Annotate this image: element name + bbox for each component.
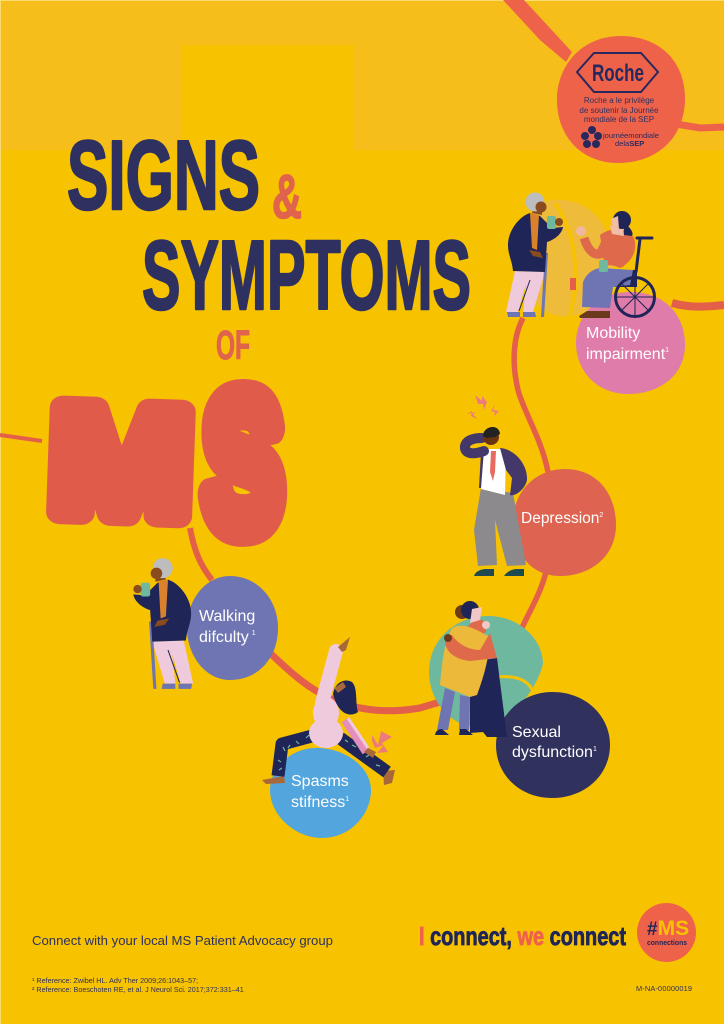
pale circle behind mobility figures <box>525 200 613 316</box>
Roche statement: de soutenir la Journée <box>579 106 659 115</box>
label: walking difficulty: 1 <box>252 630 256 637</box>
figure: standing elder with cane <box>506 192 563 317</box>
title: MS lettering: M <box>47 375 195 550</box>
arc on pale circle <box>555 203 576 316</box>
figure: man with hand on head <box>465 395 527 576</box>
bubble: walking difficulty <box>187 576 278 680</box>
title: ampersand: & <box>272 163 302 232</box>
title: Symptoms: SYMPTOMS <box>142 220 471 330</box>
Roche statement: Roche a le privilège <box>584 96 655 105</box>
world MS day logo: journéemondiale <box>602 131 659 140</box>
figure: hugging couple <box>435 601 507 737</box>
MS connections badge: connections <box>647 938 687 947</box>
footer: references: ¹ Reference: Zwibel HL. Adv Ther 2009;26:1043–57; <box>32 976 198 985</box>
label: mobility impairment: Mobility <box>586 325 640 342</box>
slogan: I connect, we connect <box>419 921 626 951</box>
Roche sponsor badge <box>557 36 685 163</box>
footer: references: ² Reference: Boeschoten RE, et al. J Neurol Sci. 2017;372:331–41 <box>32 985 244 994</box>
Roche statement: mondiale de la SEP <box>584 115 654 124</box>
bubble: sexual dysfunction <box>496 692 610 798</box>
label: walking difficulty: difculty <box>199 629 249 646</box>
connecting ribbon <box>0 0 724 711</box>
world MS day logo: delaSEP <box>615 139 644 148</box>
Roche hexagon logo <box>577 53 658 92</box>
label: mobility impairment: impairment <box>586 346 666 363</box>
title: MS lettering <box>47 355 282 570</box>
teal circle behind couple <box>429 616 543 727</box>
label: walking difficulty: Walking <box>199 608 255 625</box>
bubble: mobility impairment <box>576 292 685 394</box>
MS connections badge <box>637 903 696 962</box>
label: spasms stiffness: Spasms <box>291 773 349 790</box>
figure: elder with mug and cane <box>133 558 193 689</box>
label: depression: Depression <box>521 510 599 527</box>
world MS day logo <box>581 126 659 148</box>
footer: document code: M-NA-00000019 <box>636 984 692 993</box>
ribbon fragment on arc <box>570 278 576 290</box>
title: MS lettering: S <box>204 355 282 570</box>
label: mobility impairment: 1 <box>665 347 669 354</box>
label: spasms stiffness: 1 <box>345 796 349 803</box>
label: spasms stiffness: stifness <box>291 794 345 811</box>
bubble: depression <box>513 469 616 576</box>
label: sexual dysfunction: dysfunction <box>512 744 593 761</box>
MS connections badge: #MS <box>647 917 689 940</box>
figure: stretching woman <box>262 637 395 785</box>
arc on teal circle <box>497 677 534 694</box>
footer: advocacy line: Connect with your local MS Patient Advocacy group <box>32 933 333 948</box>
figure: woman in wheelchair <box>576 211 655 318</box>
label: sexual dysfunction: Sexual <box>512 724 561 741</box>
label: depression: 2 <box>599 512 603 519</box>
Roche wordmark: Roche <box>592 60 644 87</box>
bubble: spasms stiffness <box>270 748 371 838</box>
title: of: OF <box>216 322 250 368</box>
title: Signs: SIGNS <box>67 120 260 230</box>
label: sexual dysfunction: 1 <box>593 746 597 753</box>
